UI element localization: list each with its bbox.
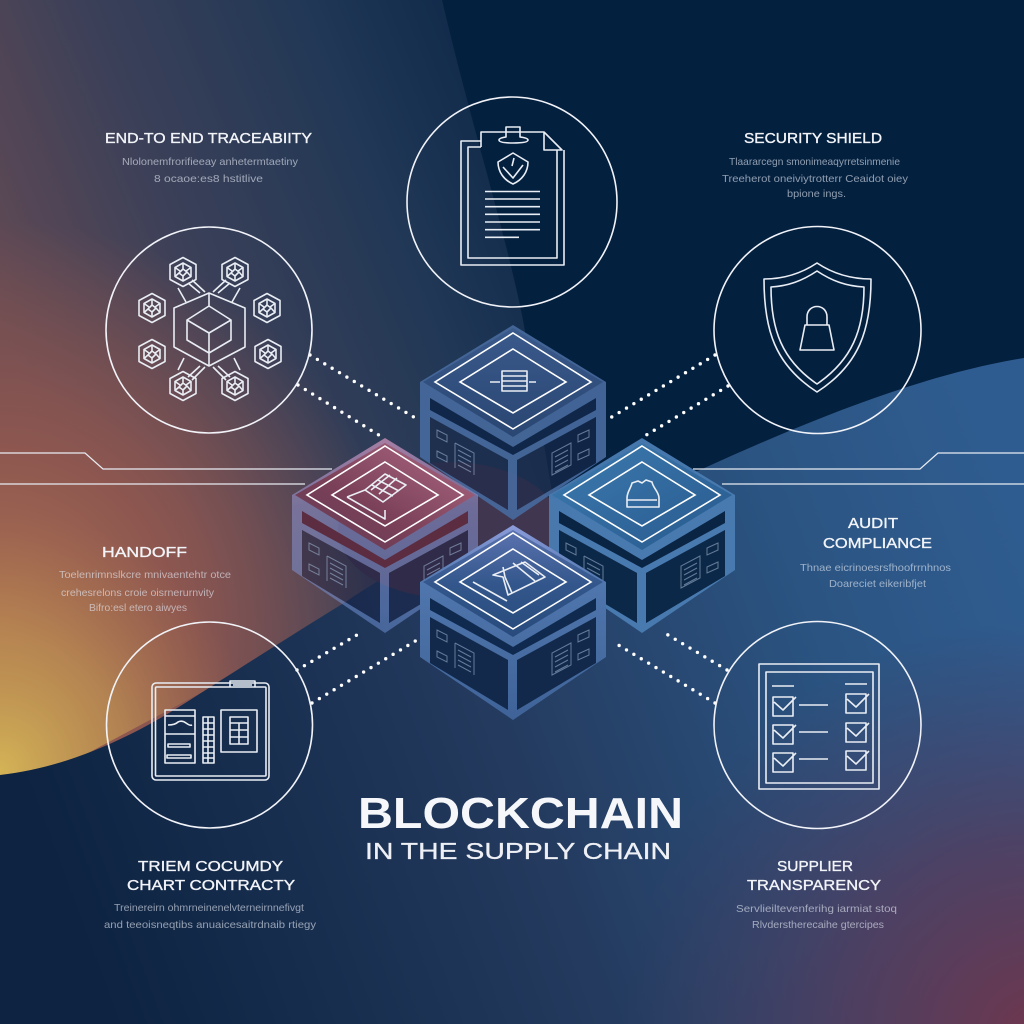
text block: security shield: Treeherot oneiviytrotterr Ceaidot oiey (722, 173, 909, 185)
title: IN THE SUPPLY CHAIN (365, 838, 671, 864)
text block: smart contract (104, 858, 317, 931)
circle: contract (106, 622, 312, 828)
background: plum disc behind cubes (338, 462, 562, 598)
circle: document (407, 97, 617, 307)
icon: hub cube with nodes (139, 258, 281, 400)
circle: traceability (106, 227, 312, 433)
dotted connectors (297, 355, 728, 703)
title (358, 789, 683, 864)
circle: security shield (714, 226, 921, 434)
text block: audit compliance: Doareciet eikeribfjet (829, 578, 926, 590)
background: lower navy to blue and burgundy wave (0, 358, 1024, 1024)
title: BLOCKCHAIN (358, 789, 683, 838)
text block: end-to-end traceability: 8 ocaoe:es8 hstitlive (154, 173, 263, 185)
icon: ledger sheet (490, 371, 536, 391)
text block: supplier transparency: Rlvderstherecaihe gtercipes (752, 919, 884, 931)
icon: document ribbon (473, 562, 545, 601)
text block: handoff: crehesrelons croie oisrnerurnvity (61, 587, 215, 599)
text block: security shield: SECURITY SHIELD (744, 130, 882, 147)
text block: audit compliance: Thnae eicrinoesrsfhoofrrnhnos (800, 562, 951, 574)
cube: front (420, 525, 606, 720)
left connector rails (0, 453, 332, 484)
text block: handoff: HANDOFF (102, 544, 187, 561)
text block: smart contract: and teeoisneqtibs anuaicesaitrdnaib rtiegy (104, 919, 317, 931)
icon: contract tablet (152, 681, 269, 780)
text block: end-to-end traceability: END-TO END TRACEABIITY (105, 130, 312, 147)
text block: supplier transparency (736, 858, 897, 931)
text block: audit compliance: COMPLIANCE (823, 535, 932, 552)
background: warm upper-left shape (0, 0, 560, 800)
text block: handoff: Toelenrimnslkcre mnivaentehtr otce (59, 569, 231, 581)
text block: audit compliance (800, 515, 951, 590)
text block: audit compliance: AUDIT (848, 515, 898, 532)
text block: supplier transparency: TRANSPARENCY (747, 877, 881, 894)
text block: security shield: Tlaararcegn smonimeaqyrretsinmenie (729, 156, 900, 168)
cube: top (420, 325, 606, 520)
right connector rails (693, 453, 1024, 484)
text block: smart contract: TRIEM COCUMDY (138, 858, 283, 875)
text block: supplier transparency: SUPPLIER (777, 858, 853, 875)
text block: security shield: bpione ings. (787, 188, 846, 200)
icon: shield with padlock (764, 263, 871, 392)
text block: supplier transparency: Servlieiltevenferihg iarmiat stoq (736, 903, 897, 915)
text block: end-to-end traceability: Nlolonemfrorifieeay anhetermtaetiny (122, 156, 299, 168)
cube: left pink (292, 438, 478, 633)
text block: smart contract: CHART CONTRACTY (127, 877, 295, 894)
icon: checklist (759, 664, 879, 789)
text block: end-to-end traceability (105, 130, 312, 185)
text block: smart contract: Treinereirn ohmrneinenelvterneirnnefivgt (114, 902, 304, 914)
text block: handoff: Bifro:esl etero aiwyes (89, 602, 187, 614)
circle: supplier checklist (714, 622, 921, 828)
cube: right blue (549, 438, 735, 633)
icon: clipboard with shield (461, 127, 564, 265)
icon: flag grid (347, 474, 406, 519)
text block: handoff (59, 544, 231, 614)
text block: security shield (722, 130, 909, 200)
icon: bag (627, 480, 659, 507)
